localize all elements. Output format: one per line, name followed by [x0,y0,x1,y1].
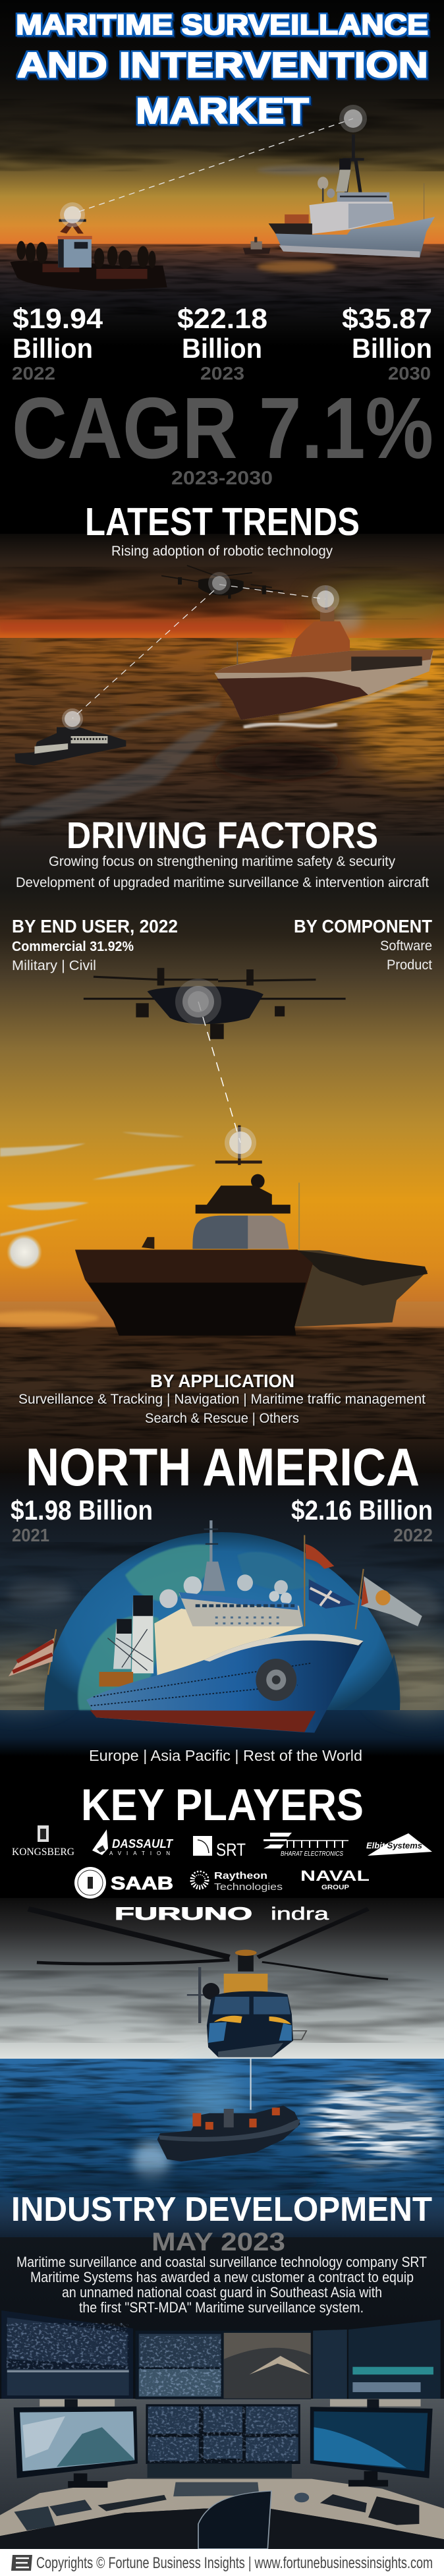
title: AND INTERVENTION [17,45,428,85]
title [16,9,428,131]
segment: by component: Product [387,958,432,973]
icon: naval ship silhouette [75,1126,428,1336]
title: MARITIME SURVEILLANCE [16,9,428,41]
icon: signal links between drone, ship and boat [62,572,339,730]
heading: key players: KEY PLAYERS [81,1780,364,1830]
logo: Dassault Aviation [92,1829,174,1856]
stat: north america 2021: 2021 [12,1525,49,1545]
segment: by end user: Military | Civil [12,958,96,973]
CAGR figure: 2023-2030 [171,468,273,489]
panel: application scene with ship and drone [0,968,444,1473]
icon: desk [0,2479,444,2549]
icon: wall behind monitors [0,2399,444,2515]
logo: Bharat Electronics: BHARAT ELECTRONICS [281,1850,343,1858]
logo: Saab: SAAB [111,1873,173,1893]
panel: rescue helicopter scene [0,1898,444,2250]
logo: Furuno: FURUNO [115,1904,252,1924]
icon: aircraft carrier [215,586,433,728]
segment: by end user [12,916,178,973]
icon: helicopter [187,1950,306,2057]
stat: 2030 market value: 2030 [388,363,431,384]
logo: Raytheon Technologies [192,1870,283,1893]
stat: 2023 market value: $22.18 [177,303,267,335]
stat: 2023 market value: Billion [182,333,262,364]
icon: small tug [243,237,271,254]
icon: lower monitors [14,2404,433,2484]
icon: Fortune Business Insights logo [11,2555,32,2571]
heading: latest trends: Rising adoption of robotic technology [111,544,333,559]
logo: Kongsberg: KONGSBERG [12,1846,74,1858]
segment: by end user: BY END USER, 2022 [12,916,178,936]
stat: 2030 market value: $35.87 [342,303,432,335]
icon: surveillance drone [161,565,283,598]
segment: by application: Surveillance & Tracking | Navigation | Maritime traffic management [18,1392,426,1407]
logo: Elbit Systems [366,1833,432,1856]
logo: Naval Group: GROUP [321,1884,349,1891]
heading: industry development [11,2190,432,2256]
segment: by component [294,916,432,973]
stat: 2030 market value: Billion [352,333,432,364]
logo: Bharat Electronics [264,1833,348,1858]
text: development description: an unnamed national coast guard in Southeast Asia with [62,2284,382,2301]
text: development description: the first "SRT-MDA" Maritime surveillance system. [79,2299,364,2316]
stat: north america 2022 [291,1495,433,1545]
logo: SRT: SRT [216,1840,246,1860]
segment: by application [18,1371,426,1426]
text: development description [16,2254,427,2316]
panel: regional scene with globe and ship [0,1473,444,1756]
panel: latest trends scene [0,534,444,977]
logo: Saab [74,1867,173,1899]
icon: drone [84,968,346,1039]
logo: Naval Group: NAVAL [300,1868,370,1884]
logo: Kongsberg [12,1825,74,1858]
stat: north america 2021: $1.98 Billion [11,1495,153,1526]
heading: driving factors: DRIVING FACTORS [67,815,378,857]
stat: 2022 market value: $19.94 [13,303,103,335]
segment: by application: Search & Rescue | Others [145,1411,299,1426]
icon: rotor blades [28,1909,388,1979]
icon: hoist cable [249,2058,252,2110]
panel: hero scene with vessels [0,0,444,346]
icon: signal link drone to ship [175,979,256,1159]
logo: Indra: indra [271,1904,329,1924]
icon: signal link between vessels [60,105,367,227]
heading: industry development: MAY 2023 [152,2228,285,2256]
stat: 2030 market value [342,303,432,384]
stat: north america 2022: 2022 [393,1525,433,1545]
icon: upper monitors [1,2310,441,2399]
footer [0,2549,444,2576]
heading: driving factors: Growing focus on strengthening maritime safety & security [49,854,395,869]
heading: latest trends: LATEST TRENDS [85,500,360,544]
stat: 2023 market value [177,303,267,384]
title: MARKET [136,90,309,131]
segment: by component: BY COMPONENT [294,916,432,936]
logo: Raytheon Technologies: Raytheon [214,1870,267,1881]
logo: Elbit Systems: Elbit Systems [366,1841,422,1850]
icon: patrol ship [269,134,435,258]
logo: Dassault Aviation: AVIATION [109,1850,170,1856]
logo: Raytheon Technologies: Technologies [214,1881,283,1893]
icon: globe [44,1532,400,1710]
icon: flags [9,1535,422,1676]
text: other regions: Europe | Asia Pacific | Rest of the World [89,1747,362,1764]
icon: rescue boat [10,219,167,291]
stat: 2022 market value [12,303,103,384]
stat: north america 2021 [11,1495,153,1545]
icon: tugboat [14,728,126,766]
icon: ship [86,1520,364,1732]
logo: Dassault Aviation: DASSAULT [112,1837,174,1850]
stat: 2022 market value: Billion [13,333,93,364]
segment: by application: BY APPLICATION [150,1371,294,1391]
icon: office chair [198,2491,271,2549]
segment: by end user: Commercial 31.92% [12,939,134,954]
heading: driving factors: Development of upgraded maritime surveillance & intervention aircraft [16,875,429,890]
heading: industry development: INDUSTRY DEVELOPMENT [11,2190,432,2229]
stat: 2023 market value: 2023 [200,363,244,384]
logo: SRT [193,1836,246,1860]
logo: Naval Group [300,1868,370,1891]
panel: control room [0,2237,444,2550]
icon: rescue boat [157,2105,300,2161]
stat: 2022 market value: 2022 [12,363,55,384]
heading: latest trends [85,500,360,559]
segment: by component: Software [380,938,432,954]
icon: setting sun [7,1234,42,1270]
heading: driving factors [16,815,429,890]
